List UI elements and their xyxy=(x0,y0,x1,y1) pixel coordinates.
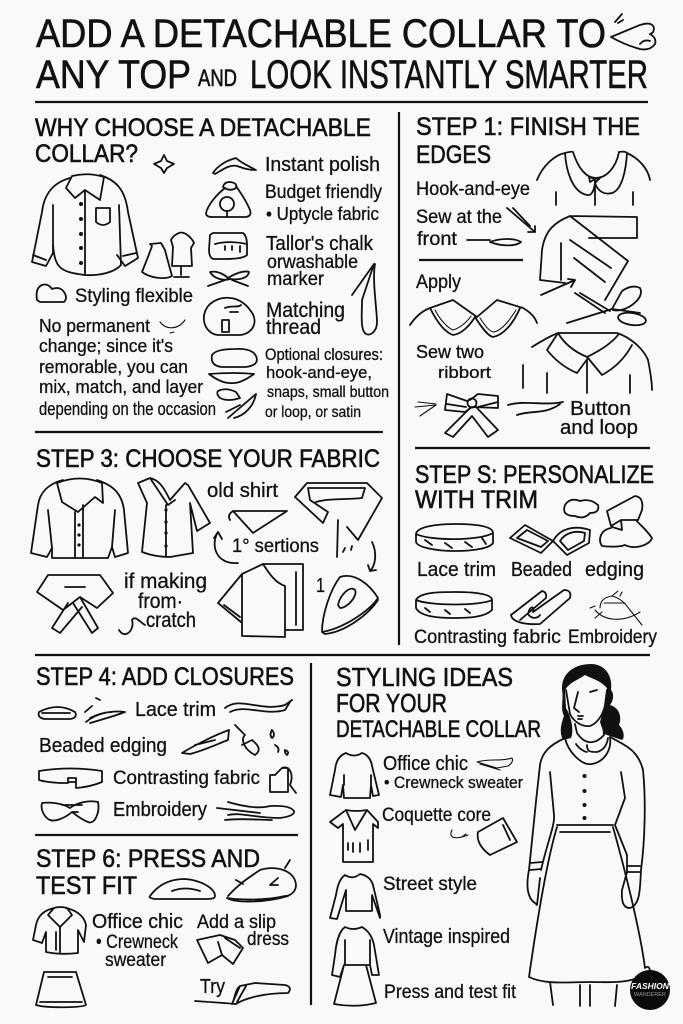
label: apply: Apply xyxy=(416,272,461,293)
icon: skirt and mannequin xyxy=(142,232,194,278)
text: tailor's chalk: orwashable xyxy=(267,252,358,273)
text block: no permanent change: remorable, you can xyxy=(39,357,188,377)
icon: beaded shapes xyxy=(510,525,590,555)
icon: folded shirt pattern xyxy=(218,564,303,637)
heading: step 1 xyxy=(416,113,640,169)
text block: no permanent change: mix, match, and layer xyxy=(39,377,203,397)
icon: left swish xyxy=(415,402,436,416)
icon: fabric clump xyxy=(564,500,598,517)
icon: small bow xyxy=(208,271,249,286)
heading: why choose: WHY CHOOSE A DETACHABLE xyxy=(35,114,371,142)
icon: closures xyxy=(209,349,257,418)
text block: no permanent change xyxy=(39,316,216,419)
heading: step 6: TEST FIT xyxy=(36,872,137,900)
label: coquette core: Coquette core xyxy=(382,805,491,826)
panel: why choose a detachable collar xyxy=(32,114,389,421)
icon: pouch xyxy=(478,818,517,855)
text: budget friendly xyxy=(265,182,382,224)
text: sew at the front: Sew at the xyxy=(416,207,502,228)
text: office chic crewneck sweater: • Crewneck sweater xyxy=(384,773,523,792)
text: sew at the front: front xyxy=(417,229,458,250)
label: press and test fit: Press and test fit xyxy=(384,982,517,1003)
text: optional closures xyxy=(265,346,389,421)
icon: iron xyxy=(227,860,296,902)
heading: step 3: STEP 3: CHOOSE YOUR FABRIC xyxy=(36,445,380,473)
icon: contrast belt xyxy=(39,768,102,788)
collar stitching xyxy=(435,310,516,332)
badge: fashion wanderer xyxy=(630,970,670,1010)
text: lace trim, beaded edging xyxy=(417,559,644,581)
text: if making from scratch: if making xyxy=(124,570,207,593)
icon: bow xyxy=(445,394,498,437)
body outline xyxy=(527,690,650,1006)
icon: pressed collar xyxy=(150,879,215,899)
icon: short shirt xyxy=(31,478,128,558)
heading: styling ideas: DETACHABLE COLLAR xyxy=(336,716,541,743)
icon: rolled ribbon xyxy=(511,590,570,624)
text: optional closures: snaps, small button xyxy=(267,384,389,401)
label: old shirt: old shirt xyxy=(207,480,278,502)
heading: why choose xyxy=(35,114,371,168)
icon: fabric band xyxy=(416,592,492,618)
icon: small fabric clip xyxy=(477,758,512,770)
panel: step 5 personalize with trim xyxy=(414,461,657,648)
text: add a slip dress: Add a slip xyxy=(197,912,276,933)
icon: chalk needle xyxy=(352,264,377,334)
title xyxy=(36,12,648,97)
icon: needle arrow xyxy=(507,208,535,232)
text: budget friendly: Budget friendly xyxy=(265,182,382,203)
icon: ribbon xyxy=(508,402,563,415)
icon: thread xyxy=(467,239,521,245)
heading: step 1: EDGES xyxy=(416,141,491,169)
icon: rolled fabric xyxy=(600,496,652,547)
icon: curved arrow xyxy=(214,532,238,563)
text: office chic crewneck: Office chic xyxy=(92,911,183,933)
icon: embroidery xyxy=(590,591,642,625)
text: if making from scratch: from· xyxy=(138,590,183,613)
label: sections: 1° sertions xyxy=(232,536,319,557)
icon: short sleeve blouse xyxy=(138,478,210,557)
icon: thread squiggle xyxy=(119,618,145,634)
text: sew two ribbons xyxy=(416,342,491,382)
heading: step 5: WITH TRIM xyxy=(415,486,538,514)
text: sew two ribbons: ribbort xyxy=(438,363,491,382)
icon: dress xyxy=(332,927,379,1006)
text: office chic crewneck sweater: Office chic xyxy=(383,753,468,775)
title: ANY TOP xyxy=(36,53,191,97)
icon: iron xyxy=(322,542,378,634)
text: office chic crewneck: • Crewneck xyxy=(96,932,178,953)
title: ADD A DETACHABLE COLLAR TO xyxy=(36,12,606,56)
icon: flat collar xyxy=(410,300,537,337)
text: if making from scratch: cratch xyxy=(146,609,196,632)
text: contrasting fabric embroidery: fabric xyxy=(513,627,561,648)
text: matching thread: thread xyxy=(266,316,321,339)
icon: fabric swatches xyxy=(197,935,243,964)
text: lace trim, beaded edging: edging xyxy=(585,559,644,581)
text: sew at the front xyxy=(416,207,502,250)
text: contrasting fabric embroidery xyxy=(414,627,657,648)
icon: skirt xyxy=(36,972,86,1007)
label: embroidery: Embroidery xyxy=(113,799,207,821)
icon: small smile xyxy=(160,320,185,333)
icon: shirt xyxy=(32,174,138,275)
label: styling flexible: Styling flexible xyxy=(75,286,193,307)
icon: hand with fabric xyxy=(195,983,290,1004)
icon: fabric bag xyxy=(206,182,250,217)
icon: large collar xyxy=(295,483,382,557)
text: button and loop: Button xyxy=(570,398,631,420)
panel: step 6 press and test fit xyxy=(33,845,296,1007)
badge: fashion wanderer: WANDERER xyxy=(634,992,666,998)
text: tailor's chalk: marker xyxy=(267,269,325,290)
icon: folded fabric xyxy=(540,216,637,300)
heading: step 1: STEP 1: FINISH THE xyxy=(416,113,640,141)
text: number one: 1 xyxy=(316,575,325,597)
dress buttons xyxy=(582,774,586,820)
text: optional closures: hook-and-eye, xyxy=(266,363,372,382)
icon: crop sweater xyxy=(330,874,380,919)
icon: tape measure xyxy=(209,233,247,259)
panel: step 1 finish the edges xyxy=(410,113,652,439)
heading: step 4: STEP 4: ADD CLOSURES xyxy=(36,663,294,691)
text block: no permanent change: change; since it's xyxy=(39,336,173,356)
text: sew two ribbons: Sew two xyxy=(416,342,484,362)
icon: crossed collar xyxy=(37,575,113,633)
icon: sparkle xyxy=(154,155,174,173)
label: lace trim: Lace trim xyxy=(135,699,216,721)
icon: pin cushion xyxy=(204,298,255,335)
icon: scattered beads xyxy=(235,725,288,755)
icon: shirt with collar xyxy=(523,333,652,393)
icon: flourish xyxy=(611,14,655,49)
icon: wavy ribbon xyxy=(225,700,292,712)
icon: bow tie xyxy=(42,801,98,822)
text block: no permanent change: No permanent xyxy=(39,316,150,336)
icon: sweater xyxy=(330,753,379,798)
text: lace trim, beaded edging: Lace trim xyxy=(417,559,496,581)
text: button and loop: and loop xyxy=(560,417,638,439)
label: street style: Street style xyxy=(383,874,477,895)
text: contrasting fabric embroidery: Contrasting xyxy=(414,627,507,648)
label: try: Try xyxy=(200,976,225,998)
text: matching thread: Matching xyxy=(266,299,345,322)
icon: lace band xyxy=(39,698,125,723)
heading: styling ideas: FOR YOUR xyxy=(336,688,447,718)
icon: v-neck blouse xyxy=(330,810,378,862)
text: add a slip dress: dress xyxy=(247,929,289,950)
label: beaded edging: Beaded edging xyxy=(39,735,167,757)
text: contrasting fabric embroidery: Embroidery xyxy=(568,627,657,648)
title: AND xyxy=(198,65,237,92)
label: instant polish: Instant polish xyxy=(265,154,380,176)
panel: styling ideas xyxy=(330,662,541,1006)
heading: styling ideas: STYLING IDEAS xyxy=(336,662,513,692)
icon: feather xyxy=(182,730,229,754)
icon: scissors xyxy=(567,287,647,327)
heading: step 6: STEP 6: PRESS AND xyxy=(36,845,260,873)
text: add a slip dress xyxy=(197,912,289,950)
text: matching thread xyxy=(266,299,345,339)
heading: why choose: COLLAR? xyxy=(35,140,138,168)
heading: step 6 xyxy=(36,845,260,900)
heading: styling ideas xyxy=(336,662,541,743)
icon: lace ring xyxy=(416,524,493,551)
icon: peter pan collar xyxy=(537,152,650,205)
text: optional closures: Optional closures: xyxy=(265,346,383,364)
text: budget friendly: • Uptycle fabric xyxy=(266,204,379,224)
text block: no permanent change: depending on the occasion xyxy=(39,399,216,419)
hair xyxy=(561,664,624,740)
text: optional closures: or loop, or satin xyxy=(265,404,361,421)
text: office chic crewneck sweater xyxy=(383,753,523,792)
text: button and loop xyxy=(560,398,638,439)
icon: arrow and pouch xyxy=(451,830,468,838)
label: contrasting fabric: Contrasting fabric xyxy=(113,768,260,789)
panel: step 4 add closures xyxy=(36,663,296,822)
text: office chic crewneck: sweater xyxy=(105,950,167,971)
icon: collar shape xyxy=(213,158,256,174)
icon: cloud xyxy=(37,284,66,302)
icon: collar piece xyxy=(229,511,287,533)
icon: short sleeve shirt xyxy=(33,907,86,954)
badge: fashion wanderer: FASHION xyxy=(631,981,670,991)
illustration: woman in dress xyxy=(527,664,650,1006)
heading: step 5 xyxy=(415,461,654,514)
panel: step 3 choose your fabric xyxy=(31,445,382,637)
text: tailor's chalk: Tallor's chalk xyxy=(266,233,374,255)
text: office chic crewneck xyxy=(92,911,183,971)
label: hook and eye: Hook-and-eye xyxy=(416,179,530,200)
label: vintage inspired: Vintage inspired xyxy=(383,926,510,948)
text: lace trim, beaded edging: Beaded xyxy=(511,559,572,581)
icon: thread needle xyxy=(217,802,294,820)
text: tailor's chalk xyxy=(266,233,374,290)
icon: fabric squares xyxy=(270,767,296,793)
text: if making from scratch xyxy=(124,570,207,632)
